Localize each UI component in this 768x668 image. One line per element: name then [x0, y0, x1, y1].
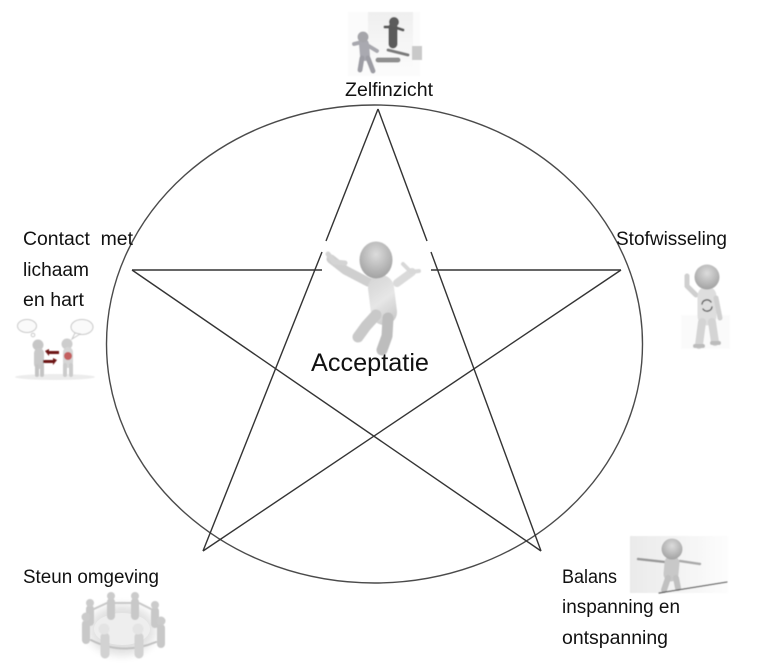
circle — [106, 105, 642, 583]
label: Acceptatie: Acceptatie — [311, 349, 429, 377]
label: Zelfinzicht: Zelfinzicht — [345, 80, 434, 101]
label: Contact met lichaam en hart — [23, 229, 134, 311]
icon: jumping figure — [328, 242, 419, 350]
node: Zelfinzicht — [345, 12, 434, 101]
label: Balans inspanning en ontspanning: ontspanning — [562, 628, 668, 649]
node: Balans inspanning en ontspanning — [562, 536, 728, 649]
icon: circle of figures — [82, 592, 166, 660]
label: Contact met lichaam en hart: en hart — [23, 290, 85, 311]
icon: figures and shadow on wall — [348, 12, 422, 76]
node: Steun omgeving — [23, 567, 166, 660]
label: Balans inspanning en ontspanning — [562, 567, 680, 649]
label: Contact met lichaam en hart: Contact met — [23, 229, 134, 250]
icon: figure with thumb up — [681, 264, 730, 349]
label: Stofwisseling: Stofwisseling — [616, 229, 727, 250]
node: Contact met lichaam en hart — [15, 229, 134, 380]
icon: two figures with speech bubbles — [15, 320, 95, 380]
node: Stofwisseling — [616, 229, 730, 349]
label: Balans inspanning en ontspanning: inspanning en — [562, 597, 680, 618]
label: Steun omgeving: Steun omgeving — [23, 567, 159, 588]
diagram: circle with pentagram — [106, 105, 642, 583]
pentagram star — [132, 109, 621, 551]
label: Contact met lichaam en hart: lichaam — [23, 260, 89, 281]
icon: figure on tightrope — [630, 536, 728, 593]
label: Balans inspanning en ontspanning: Balans — [562, 567, 617, 588]
